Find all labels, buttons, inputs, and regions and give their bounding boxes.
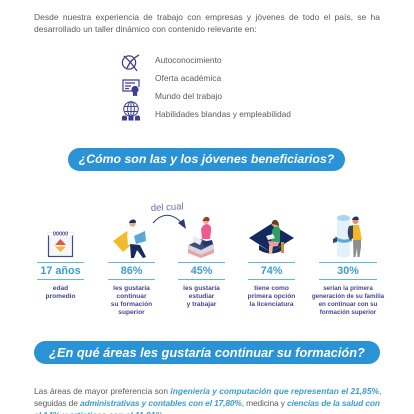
icon: calendar: 00000 (53, 232, 68, 238)
stat: 45%: les gustaría (183, 285, 220, 292)
stat: 45%: estudiar (189, 293, 214, 300)
stat: average age: edad (53, 285, 68, 292)
closing paragraph (34, 386, 381, 414)
stat: 86%: 86% (121, 265, 142, 277)
stat: 45%: 45% (191, 265, 212, 277)
heading: areas of study: ¿En qué áreas les gustaría continuar su formación? (49, 345, 365, 360)
stat: 74% (248, 262, 295, 308)
stat: 30%: formación superior (320, 309, 376, 316)
closing paragraph: Las áreas de mayor preferencia son ingeniería y computación que representan el 21,85%, (34, 386, 381, 396)
stat: 74%: tiene como (254, 285, 289, 292)
icon: certificate (122, 79, 140, 96)
stat: 86%: continuar (116, 293, 147, 300)
stat: 30%: en continuar con su (319, 301, 377, 308)
heading: beneficiaries: ¿Cómo son las y los jóvenes beneficiarios? (79, 152, 334, 166)
stat: 45% (178, 262, 225, 308)
illustration: student on stack of books (188, 216, 214, 258)
stat: average age: 17 años (40, 265, 81, 277)
stat: average age (37, 262, 84, 300)
stat: 74%: la licenciatura (250, 301, 293, 308)
heading: areas of study (34, 341, 380, 364)
stat: 86%: su formación (111, 301, 152, 308)
intro text (34, 12, 380, 34)
stat: 86%: superior (118, 309, 145, 316)
closing paragraph: seguidas de administrativas y contables con el 17,80%, medicina y ciencias de la salud con (34, 398, 380, 408)
stat: 30% (312, 262, 384, 316)
icon: world with people (122, 101, 140, 120)
intro text: desarrollado un taller dinámico con contenido relevante en: (34, 24, 257, 34)
stat: 30%: generación de su familia (312, 293, 384, 300)
illustration: student with laptop on book (113, 220, 146, 258)
stat: 74%: primera opción (248, 293, 295, 300)
stat: 45%: y trabajar (187, 301, 216, 308)
list of workshop topics (155, 55, 291, 119)
stat: average age: promedio (45, 293, 76, 300)
icon: calendar (48, 232, 74, 258)
stat: 30%: 30% (337, 265, 359, 277)
list of workshop topics: Mundo del trabajo (155, 91, 222, 101)
arrow with label: del cual: del cual (151, 201, 184, 214)
stat: 30%: serían la primera (323, 285, 373, 292)
list of workshop topics: Habilidades blandas y empleabilidad (155, 109, 291, 119)
heading: beneficiaries (68, 148, 345, 171)
stat: 86% (108, 262, 155, 316)
arrow with label: del cual (151, 201, 186, 229)
list of workshop topics: Oferta académica (155, 73, 221, 83)
icon: self-knowledge (122, 54, 140, 72)
intro text: Desde nuestra experiencia de trabajo con empresas y jóvenes de todo el país, se ha (34, 12, 380, 22)
illustration: student on graduation cap (249, 220, 294, 254)
illustration: student with diploma scroll (333, 215, 362, 258)
stat: 86%: les gustaría (113, 285, 150, 292)
list of workshop topics: Autoconocimiento (155, 55, 222, 65)
stat: 74%: 74% (261, 265, 282, 277)
